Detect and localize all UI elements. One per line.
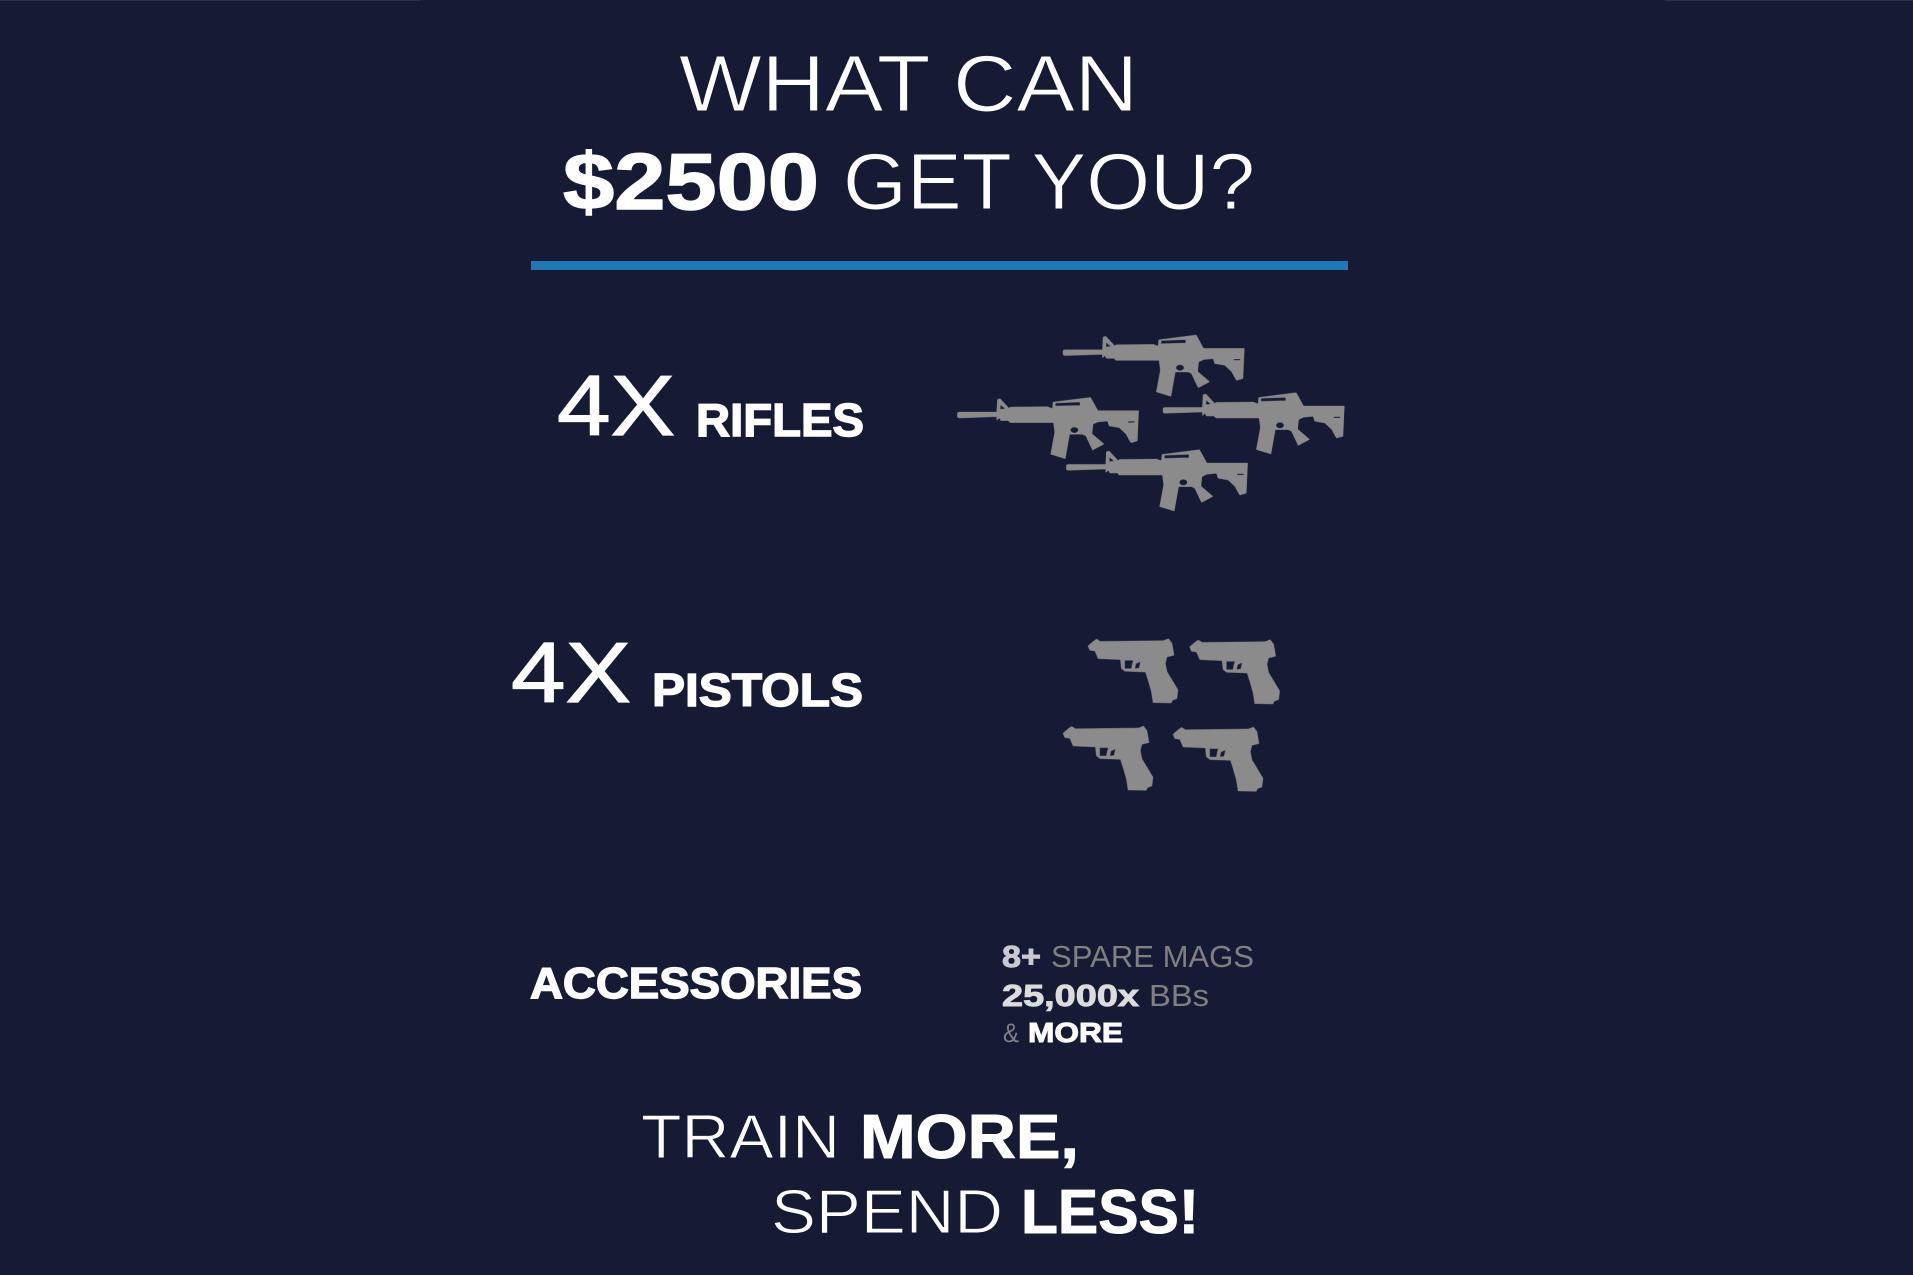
icon: rifle right: [1163, 393, 1344, 454]
icon: pistol bottom right: [1173, 727, 1263, 791]
icon: pistol top right: [1190, 640, 1279, 704]
closing slogan: SPEND: [771, 1178, 1003, 1247]
label: accessories: ACCESSORIES: [530, 959, 862, 1008]
item: bbs: 25,000x: [1002, 978, 1140, 1013]
item: more: &: [1003, 1018, 1019, 1048]
label: 4x pistols: [511, 626, 863, 721]
icon: rifle top: [1063, 335, 1244, 396]
closing slogan: MORE,: [860, 1103, 1079, 1172]
item: spare mags: SPARE MAGS: [1051, 939, 1254, 974]
label: 4x rifles: RIFLES: [696, 394, 864, 446]
icon: rifle left: [958, 398, 1138, 458]
label: 4x rifles: [557, 359, 864, 454]
label: 4x pistols: 4X: [511, 626, 631, 721]
title: GET YOU?: [843, 137, 1255, 226]
closing slogan: TRAIN: [641, 1103, 840, 1172]
icon: pistol bottom left: [1063, 726, 1153, 790]
item: bbs: BBs: [1149, 978, 1209, 1013]
title: [563, 39, 1255, 226]
title divider: [531, 261, 1348, 270]
item: more: MORE: [1028, 1017, 1123, 1048]
icons: four pistols: [1063, 639, 1279, 791]
closing slogan: [641, 1103, 1199, 1247]
icon: rifle bottom: [1067, 450, 1247, 511]
top edge highlight right: [1665, 0, 1913, 1]
title: $2500: [563, 137, 819, 226]
accessories list: [1002, 939, 1254, 1048]
icon: pistol top left: [1088, 639, 1178, 703]
item: bbs: [1002, 978, 1209, 1013]
closing slogan: LESS!: [1021, 1178, 1199, 1247]
top edge highlight left: [0, 0, 420, 1]
icons: four rifles: [958, 335, 1344, 511]
label: 4x rifles: 4X: [557, 359, 675, 454]
title: WHAT CAN: [679, 39, 1138, 128]
label: 4x pistols: PISTOLS: [652, 664, 863, 716]
item: spare mags: 8+: [1002, 939, 1041, 974]
